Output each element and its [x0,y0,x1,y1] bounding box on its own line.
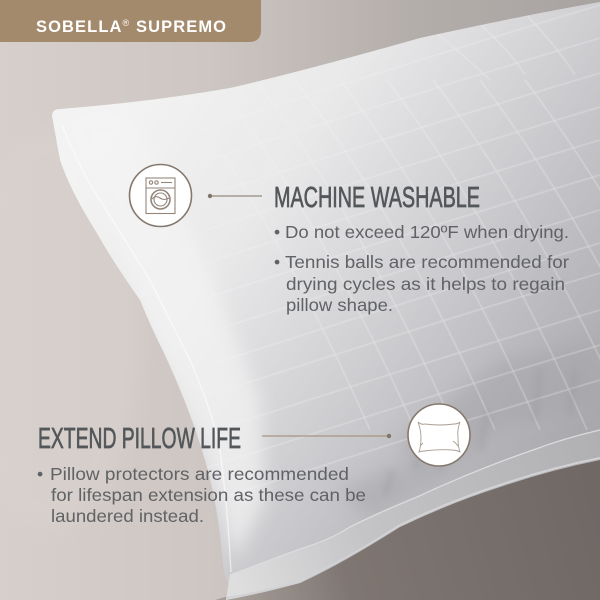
text block: machine washable bullets: Tennis balls are recommended for [285,252,569,272]
banner: product name [0,0,261,42]
text block: extend pillow life bullet: laundered instead. [51,506,204,526]
pillow quilted grid [270,5,600,482]
text block: extend pillow life bullet: for lifespan extension as these can be [51,485,366,505]
text block: machine washable bullets: drying cycles as it helps to regain [286,274,565,294]
text block: machine washable bullets: • [274,252,280,272]
icon: washing machine [130,164,192,226]
connector: heading to pillow icon [262,434,391,438]
text block: extend pillow life bullet [37,464,366,526]
pillow shading [174,300,565,550]
text block: machine washable bullets: • [274,222,280,242]
text block: extend pillow life bullet: • [37,464,43,484]
heading: extend pillow life: EXTEND PILLOW LIFE [38,423,241,455]
text block: machine washable bullets [274,222,569,315]
pillow streaks [487,396,573,415]
heading: machine washable: MACHINE WASHABLE [274,182,480,214]
banner text: ® [123,18,130,28]
text block: machine washable bullets: Do not exceed 120ºF when drying. [285,222,569,242]
banner text: SUPREMO [130,18,226,36]
connector: washing machine to heading [208,194,262,198]
pillow side seam [185,350,232,572]
text block: machine washable bullets: pillow shape. [286,295,393,315]
banner text: SOBELLA [36,18,121,36]
text block: extend pillow life bullet: Pillow protectors are recommended [50,464,349,484]
pillow flange [226,430,600,600]
icon: pillow [408,404,470,466]
